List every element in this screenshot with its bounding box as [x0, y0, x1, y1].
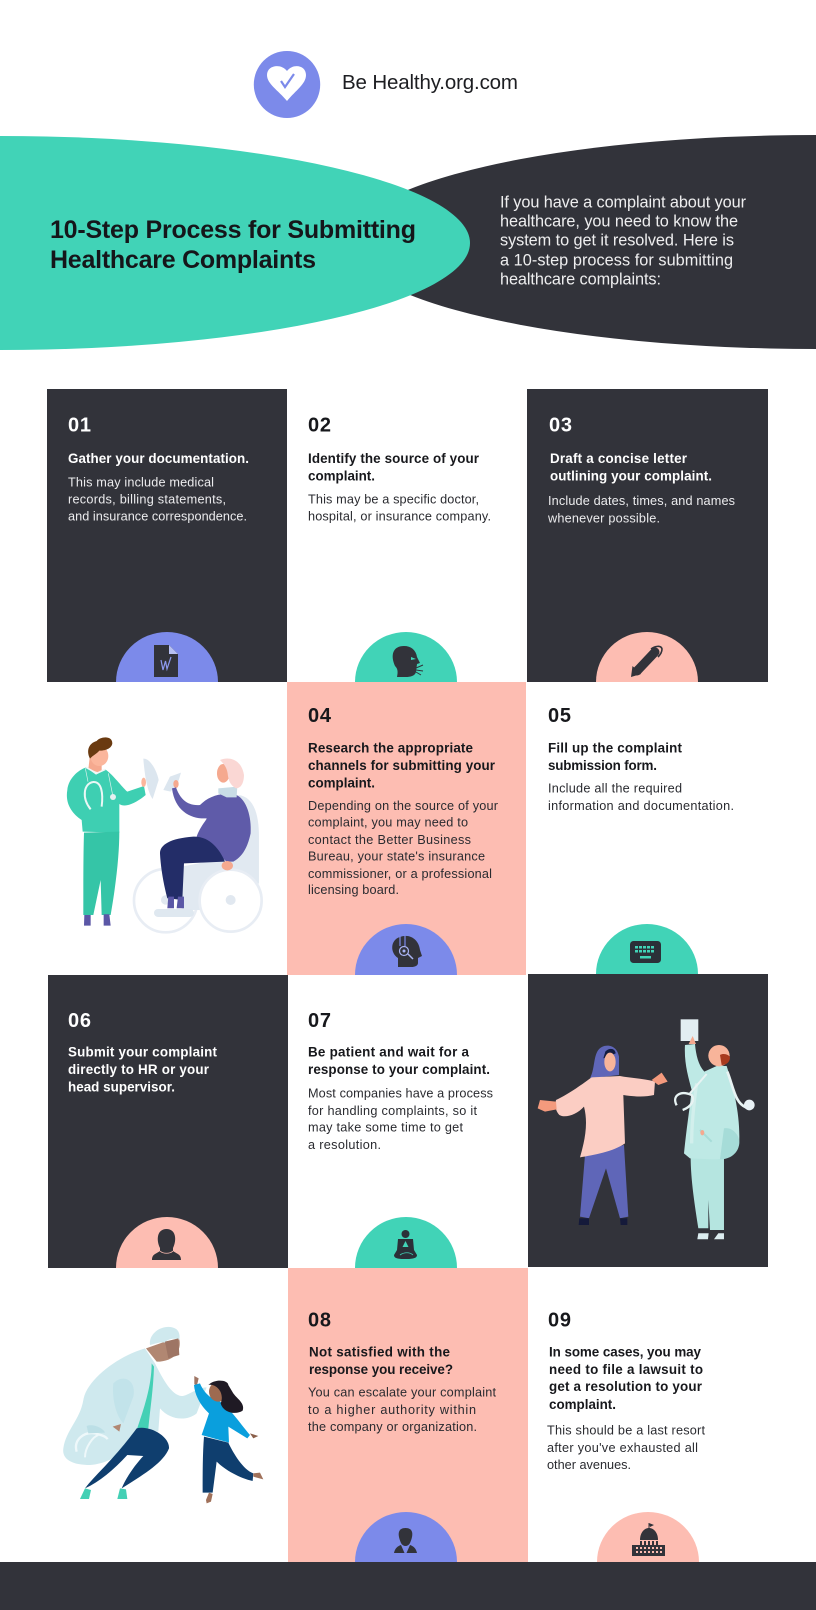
icon: speaking head	[393, 646, 423, 677]
panel: step 08: the company or organization.	[308, 1420, 477, 1434]
panel: step 09: This should be a last resort	[547, 1423, 705, 1437]
intro text: healthcare, you need to know the	[500, 213, 738, 231]
panel: step 01: This may include medical	[68, 476, 214, 490]
panel: step 04: commissioner, or a professional	[308, 867, 492, 881]
panel: step 07	[308, 1010, 493, 1268]
panel: step 04: Research the appropriate	[308, 741, 473, 756]
title: 10-Step Process for Submitting	[50, 216, 416, 244]
panel: step 01	[47, 389, 287, 682]
illustration: older doctor and child high five	[63, 1327, 263, 1503]
panel: step 05: submission form.	[548, 758, 657, 773]
panel: step 02: Identify the source of your	[308, 451, 480, 466]
panel: step 05	[548, 705, 734, 974]
panel: step 02: 02	[308, 415, 331, 437]
panel: step 09: In some cases, you may	[549, 1344, 702, 1359]
panel: step 08: Not satisfied with the	[309, 1344, 450, 1359]
panel: step 09: other avenues.	[547, 1458, 631, 1472]
panel: step 07: Be patient and wait for a	[308, 1045, 470, 1060]
icon: meditating person	[394, 1230, 417, 1259]
icon: pen	[631, 646, 662, 677]
panel: step 03: whenever possible.	[547, 512, 660, 526]
panel: step 01: records, billing statements,	[68, 492, 226, 506]
title: Healthcare Complaints	[50, 246, 316, 274]
panel: step 09: 09	[548, 1310, 571, 1332]
panel: step 06	[48, 975, 288, 1268]
panel: step 01: 01	[68, 415, 91, 437]
panel: step 04: Bureau, your state's insurance	[308, 850, 485, 864]
panel: step 09	[547, 1310, 705, 1562]
panel: step 02: This may be a specific doctor,	[308, 492, 479, 506]
icon: document	[154, 645, 178, 677]
panel: step 01: Gather your documentation.	[68, 451, 249, 466]
illustration: woman and doctor on dark panel	[528, 974, 768, 1267]
panel: step 07: for handling complaints, so it	[308, 1104, 477, 1118]
panel: step 07: a resolution.	[308, 1138, 381, 1152]
panel: step 02: complaint.	[308, 468, 375, 484]
panel: step 07: may take some time to get	[308, 1120, 463, 1134]
intro text	[500, 194, 747, 289]
panel: step 08: to a higher authority within	[308, 1403, 476, 1417]
panel: step 03: Draft a concise letter	[550, 451, 688, 466]
panel: step 05: information and documentation.	[548, 799, 734, 813]
panel: step 08	[288, 1268, 528, 1562]
panel: step 04: channels for submitting your	[308, 758, 496, 773]
panel: step 03: outlining your complaint.	[550, 468, 712, 484]
panel: step 07: Most companies have a process	[308, 1087, 493, 1101]
panel: step 04: complaint, you may need to	[308, 816, 468, 830]
panel: step 04: licensing board.	[308, 883, 399, 897]
panel: step 01: and insurance correspondence.	[68, 510, 247, 524]
panel: step 03: 03	[549, 415, 572, 437]
panel: step 06: head supervisor.	[68, 1080, 175, 1094]
panel: step 05: 05	[548, 705, 571, 727]
panel: step 08: 08	[308, 1310, 331, 1332]
panel: step 04	[287, 682, 526, 975]
icon: person	[152, 1229, 181, 1260]
logo	[254, 51, 320, 118]
intro text: healthcare complaints:	[500, 271, 661, 289]
panel: step 03: Include dates, times, and names	[548, 494, 735, 508]
panel: step 06: 06	[68, 1010, 91, 1032]
intro text: If you have a complaint about your	[500, 194, 747, 212]
panel: step 08: response you receive?	[309, 1362, 453, 1377]
icon: headset head	[392, 935, 422, 967]
title	[50, 216, 416, 274]
panel: step 05: Fill up the complaint	[548, 741, 683, 756]
panel: step 09: need to file a lawsuit to	[549, 1362, 703, 1377]
panel: step 09: after you've exhausted all	[547, 1441, 698, 1455]
panel: step 04: Depending on the source of your	[308, 799, 499, 813]
panel: step 06: directly to HR or your	[68, 1062, 210, 1077]
panel: step 03	[527, 389, 768, 682]
panel: step 05: Include all the required	[548, 782, 682, 796]
brand name: Be Healthy.org.com	[342, 71, 518, 94]
footer bar	[0, 1562, 816, 1610]
panel: step 04: 04	[308, 705, 332, 727]
panel: step 07: 07	[308, 1010, 331, 1032]
title panel: teal ellipse	[0, 136, 470, 350]
icon: keyboard	[630, 941, 661, 963]
panel: step 02	[308, 415, 491, 682]
illustration: doctor and wheelchair patient	[67, 737, 262, 932]
intro text: a 10-step process for submitting	[500, 252, 733, 270]
icon: businessman	[394, 1528, 417, 1553]
panel: step 08: You can escalate your complaint	[308, 1386, 496, 1400]
icon: capitol building	[632, 1523, 665, 1556]
panel: step 07: response to your complaint.	[308, 1062, 490, 1077]
panel: step 09: complaint.	[549, 1397, 616, 1412]
panel: step 06: Submit your complaint	[68, 1045, 218, 1060]
intro text: system to get it resolved. Here is	[500, 232, 734, 250]
panel: step 04: contact the Better Business	[308, 833, 471, 847]
panel: step 02: hospital, or insurance company.	[308, 510, 491, 524]
intro panel: dark ellipse	[349, 135, 816, 349]
panel: step 09: get a resolution to your	[549, 1379, 703, 1394]
panel: step 04: complaint.	[308, 776, 375, 790]
